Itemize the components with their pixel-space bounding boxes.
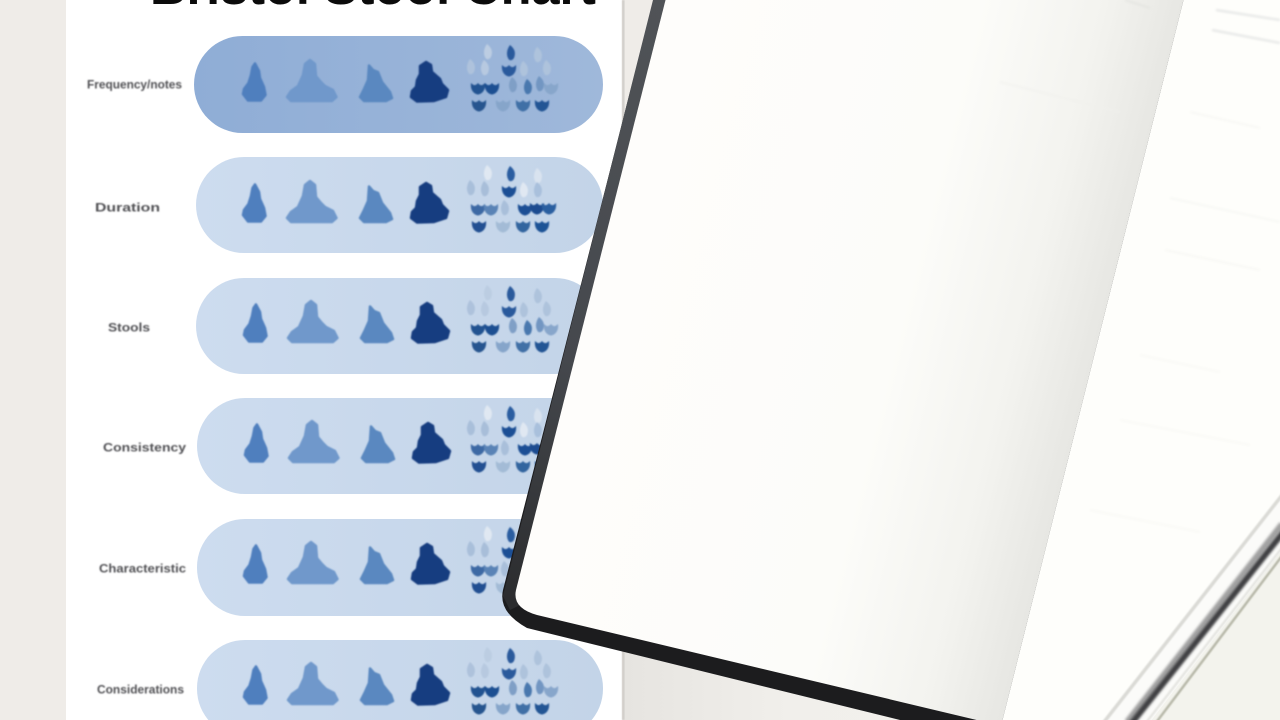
page edge band and dark cover edge bbox=[1104, 494, 1280, 720]
cover side edge bbox=[503, 0, 666, 610]
panel: chart sheet bbox=[66, 0, 624, 720]
desk beyond lower right edge bbox=[1145, 545, 1280, 720]
lower desk surface bbox=[623, 600, 1280, 720]
row 4: Consistency bbox=[103, 442, 187, 454]
row 5: Characteristic bbox=[99, 564, 187, 576]
row 2 bbox=[95, 157, 603, 253]
notebook cover bottom edge bbox=[502, 0, 1184, 720]
row 4 bbox=[103, 398, 603, 494]
left notebook page bbox=[515, 0, 1184, 720]
row 5 bbox=[99, 519, 603, 616]
notebook photo bbox=[502, 0, 1280, 720]
row 3 bbox=[108, 278, 603, 374]
row 6: Considerations bbox=[97, 684, 184, 696]
faint ruled lines on pages bbox=[1000, 0, 1280, 532]
row 1: Frequency/notes bbox=[87, 80, 182, 92]
row 2: Duration bbox=[95, 202, 160, 214]
row 6 bbox=[97, 640, 603, 720]
row 3: Stools bbox=[108, 322, 150, 334]
row 1 bbox=[87, 36, 603, 133]
right notebook page bbox=[1002, 0, 1280, 720]
